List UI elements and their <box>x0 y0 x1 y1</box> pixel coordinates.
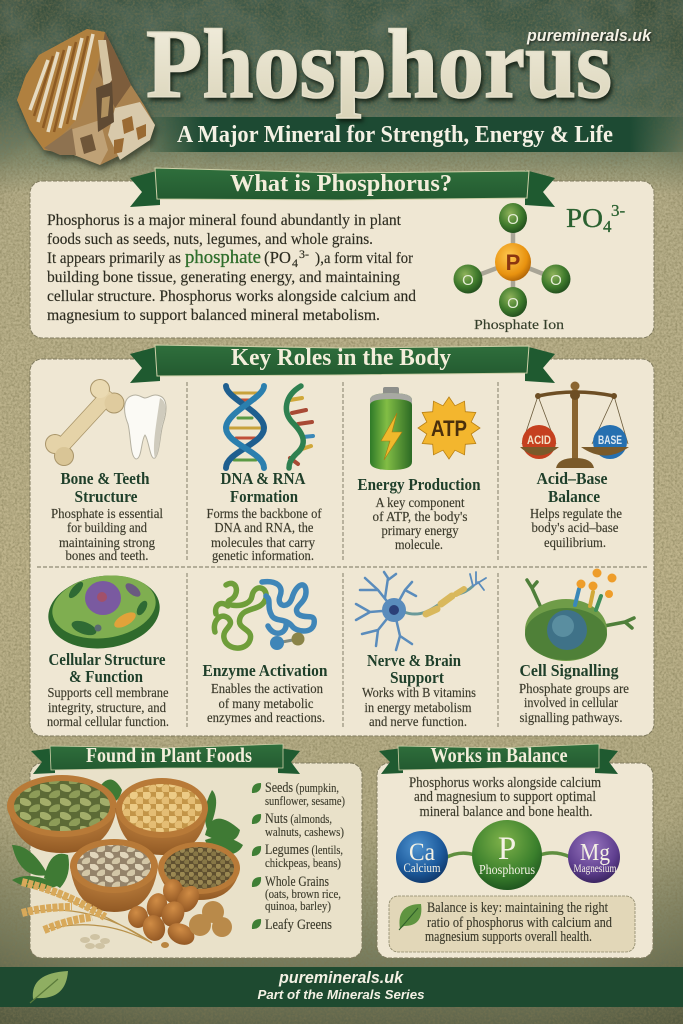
food list: Nuts (almonds, <box>265 811 332 827</box>
card description: molecule. <box>395 537 443 552</box>
card description: signalling pathways. <box>520 710 622 725</box>
icon: tooth <box>125 395 166 459</box>
card: energy production <box>358 387 481 552</box>
body text <box>47 212 416 324</box>
card: nerve and brain: Support <box>390 668 444 687</box>
callout text: ratio of phosphorus with calcium and <box>427 915 613 931</box>
phosphate molecule: O <box>462 272 474 289</box>
card description: integrity, structure, and <box>48 700 166 715</box>
card description <box>51 506 163 563</box>
sphere: magnesium: Mg <box>580 840 610 866</box>
icon: atp starburst <box>418 397 480 459</box>
body text: foods such as seeds, nuts, legumes, and whole grains. <box>47 231 373 248</box>
sphere: phosphorus <box>472 820 542 890</box>
icon: balance scale: ACID <box>527 433 551 447</box>
icon: bone <box>45 379 124 466</box>
card description: normal cellular function. <box>47 714 169 729</box>
card description <box>47 685 169 729</box>
footer website: pureminerals.uk <box>278 968 404 987</box>
body text: a form vital for <box>324 250 414 267</box>
section banner: what is phosphorus <box>130 168 555 207</box>
card description: involved in cellular <box>524 695 618 710</box>
card description: molecules that carry <box>211 535 315 550</box>
callout text <box>425 900 613 945</box>
food list: quinoa, barley) <box>265 898 331 913</box>
balance paragraph: Phosphorus works alongside calcium <box>409 775 601 791</box>
card heading: Bone & Teeth <box>60 469 150 488</box>
card description: Enables the activation <box>211 681 323 696</box>
card heading: Nerve & Brain <box>367 651 461 670</box>
sphere: magnesium: Magnesium <box>574 861 617 875</box>
card heading: Cellular Structure <box>48 650 166 669</box>
formula <box>566 201 626 236</box>
icon: battery <box>370 387 412 470</box>
card: bone and teeth: Structure <box>74 487 138 506</box>
balance paragraph: mineral balance and bone health. <box>420 804 592 820</box>
bowl: beans <box>70 839 158 912</box>
panel: found in plant foods <box>7 743 362 958</box>
body text: 4 <box>292 256 298 270</box>
food list: chickpeas, beans) <box>265 855 341 870</box>
heading: What is Phosphorus? <box>230 171 452 197</box>
leaves behind bowls <box>12 780 243 889</box>
food list: Seeds (pumpkin, <box>265 780 339 796</box>
card description: equilibrium. <box>544 535 606 550</box>
heading: Found in Plant Foods <box>86 743 252 767</box>
card description: DNA and RNA, the <box>214 520 314 535</box>
card description: for building and <box>67 520 147 535</box>
card description <box>372 495 468 552</box>
card: cell signalling <box>519 568 634 725</box>
card description: Phosphate groups are <box>519 681 629 696</box>
body text: (PO <box>264 248 291 267</box>
card description: genetic information. <box>212 548 314 563</box>
subtitle: A Major Mineral for Strength, Energy & Life <box>177 122 613 148</box>
body text: building bone tissue, generating energy, and maintaining <box>47 269 400 286</box>
card description: maintaining strong <box>59 535 155 550</box>
card: acid-base balance: Balance <box>548 487 600 506</box>
section banner: plant foods <box>31 743 300 774</box>
card description <box>206 506 322 563</box>
illustration: foods <box>7 775 243 949</box>
bowl: lentils <box>158 842 240 900</box>
heading: Works in Balance <box>430 743 568 767</box>
card description: primary energy <box>382 523 459 538</box>
body text: phosphate <box>185 248 261 268</box>
food list: Legumes (lentils, <box>265 842 343 858</box>
food list: Leafy Greens <box>265 917 332 933</box>
phosphate molecule <box>454 203 570 317</box>
card description: of many metabolic <box>218 696 314 711</box>
phosphate molecule: O <box>507 295 519 312</box>
card description: Phosphate is essential <box>51 506 163 521</box>
bowl: pumpkin seeds <box>7 775 117 853</box>
card description <box>207 681 325 725</box>
website label: pureminerals.uk <box>526 26 652 45</box>
icon: rna strand <box>286 386 313 468</box>
body text: It appears primarily as <box>47 250 181 267</box>
body text: Phosphorus is a major mineral found abundantly in plant <box>47 212 402 229</box>
bullet leaves <box>252 783 261 929</box>
card heading: DNA & RNA <box>220 469 306 488</box>
icon: signalling cell <box>525 568 634 661</box>
card: enzyme activation <box>202 582 328 725</box>
card description: Forms the backbone of <box>206 506 322 521</box>
nuts <box>128 879 232 949</box>
food list: Whole Grains <box>265 874 329 890</box>
icon: neuron <box>356 572 486 650</box>
card description <box>519 681 629 725</box>
sphere: phosphorus: Phosphorus <box>479 862 535 877</box>
formula: 4 <box>603 217 612 236</box>
formula: PO <box>566 203 603 233</box>
card description: Works with B vitamins <box>362 685 476 700</box>
icon: atp starburst: ATP <box>431 416 467 441</box>
icon: leaf <box>399 904 421 930</box>
card description: Helps regulate the <box>530 506 622 521</box>
card description <box>530 506 622 550</box>
card description <box>362 685 476 729</box>
food list: sunflower, sesame) <box>265 793 345 808</box>
card heading: Energy Production <box>358 475 481 494</box>
body text: magnesium to support balanced mineral metabolism. <box>47 307 380 324</box>
food list: walnuts, cashews) <box>265 824 344 839</box>
icon: balance scale: BASE <box>598 433 622 447</box>
icon: dna helix <box>226 386 264 468</box>
icon: plant cell <box>44 569 164 655</box>
balance paragraph <box>409 775 601 820</box>
card: cellular structure <box>44 569 169 729</box>
card: bone and teeth <box>45 379 166 563</box>
bowl: chickpeas <box>115 778 208 855</box>
molecule label: Phosphate Ion <box>474 318 564 333</box>
callout text: Balance is key: maintaining the right <box>427 900 608 916</box>
card description: enzymes and reactions. <box>207 710 325 725</box>
heading: Key Roles in the Body <box>231 345 451 371</box>
balance paragraph: and magnesium to support optimal <box>414 789 596 805</box>
card: dna and rna <box>206 386 322 563</box>
mineral spheres <box>396 820 620 890</box>
card heading: Cell Signalling <box>520 661 619 680</box>
food list <box>252 780 345 933</box>
card: dna and rna: Formation <box>230 487 298 506</box>
section banner: works in balance <box>379 743 618 774</box>
card: nerve and brain <box>356 572 486 729</box>
panel: key roles <box>30 345 654 736</box>
panel: what is phosphorus <box>30 168 654 338</box>
card description: bones and teeth. <box>66 548 148 563</box>
sphere: calcium <box>396 831 448 883</box>
sphere: calcium: Calcium <box>404 861 441 875</box>
callout text: magnesium supports overall health. <box>425 929 592 945</box>
section banner: key roles <box>130 345 555 383</box>
card description: A key component <box>376 495 465 510</box>
card description: in energy metabolism <box>364 700 472 715</box>
title: Phosphorus <box>146 10 612 119</box>
icon: footer leaf <box>30 971 68 1003</box>
sphere: phosphorus: P <box>498 831 516 867</box>
icon: enzyme protein <box>214 582 314 648</box>
footer tagline: Part of the Minerals Series <box>258 987 424 1002</box>
sphere: magnesium <box>568 831 620 883</box>
card description: Supports cell membrane <box>48 685 169 700</box>
body text: ), <box>315 250 324 267</box>
phosphate molecule: O <box>550 272 562 289</box>
food list: (oats, brown rice, <box>265 886 341 901</box>
card: acid-base balance <box>520 382 629 550</box>
card description: and nerve function. <box>369 714 467 729</box>
footer band <box>0 967 683 1007</box>
rock illustration <box>17 29 155 165</box>
card: cellular structure: & Function <box>69 667 143 686</box>
card description: of ATP, the body's <box>372 509 468 524</box>
callout: balance is key <box>389 896 635 952</box>
card description: body's acid–base <box>532 520 618 535</box>
sphere: calcium: Ca <box>409 839 435 866</box>
body text: 3- <box>299 247 309 261</box>
panel: works in balance <box>377 743 653 958</box>
card heading: Enzyme Activation <box>202 661 328 680</box>
phosphate molecule: O <box>507 211 519 228</box>
body text: cellular structure. Phosphorus works alongside calcium and <box>47 288 416 305</box>
card heading: Acid–Base <box>536 469 608 488</box>
subtitle band <box>150 117 683 152</box>
phosphate molecule: P <box>506 250 520 275</box>
icon: balance scale <box>520 382 629 468</box>
wheat <box>22 882 152 943</box>
formula: 3- <box>611 201 626 220</box>
grains pile <box>80 934 169 949</box>
